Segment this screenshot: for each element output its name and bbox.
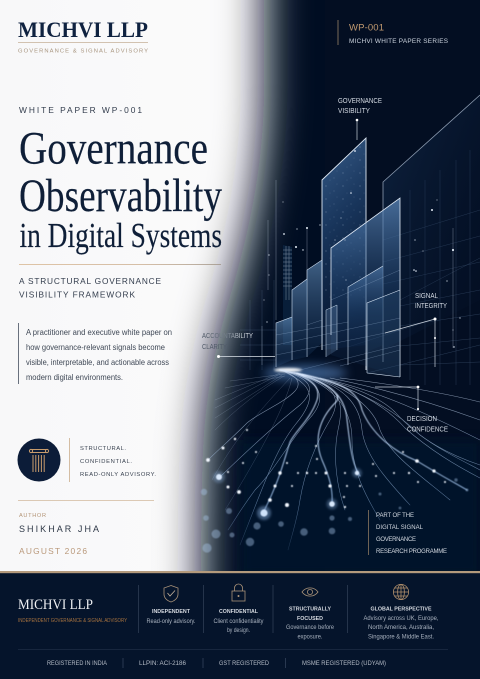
callout: governance visibility: VISIBILITY [338,106,370,115]
panel D [348,266,383,360]
feature: structurally focused: FOCUSED [297,616,323,622]
title: Governance [19,122,208,174]
eyebrow: WHITE PAPER WP-001 [19,105,142,115]
feature: confidential [214,584,264,634]
motto: STRUCTURAL. [80,446,126,452]
registration row: REGISTERED IN INDIA [47,661,107,667]
feature: global perspective: North America, Australia, [368,625,434,631]
background grid lines [240,150,480,385]
registration row: GST REGISTERED [219,661,270,667]
callout: signal integrity: INTEGRITY [415,301,447,310]
callout: decision confidence [375,386,448,434]
panel I [326,305,337,357]
callout: signal integrity: SIGNAL [415,291,438,300]
feature: global perspective: Advisory across UK, Europe, [364,616,439,622]
footer band [0,571,480,679]
subtitle: VISIBILITY FRAMEWORK [19,290,135,300]
author [19,513,99,556]
feature: independent [146,586,196,625]
abstract: how governance-relevant signals become [26,342,165,352]
feature: global perspective: GLOBAL PERSPECTIVE [370,606,432,612]
subtitle [19,276,161,300]
callout: governance visibility [338,96,382,140]
feature: structurally focused: exposure. [298,634,323,640]
feature: structurally focused: STRUCTURALLY [289,606,331,612]
research programme note: PART OF THE [376,513,414,519]
panel B outline [383,95,480,350]
vanishing point glow [263,365,347,381]
series tag: MICHVI WHITE PAPER SERIES [349,38,448,45]
subtitle: A STRUCTURAL GOVERNANCE [19,276,161,286]
author: SHIKHAR JHA [19,524,99,534]
panel G [292,279,307,360]
panel A [322,138,366,350]
abstract: visible, interpretable, and actionable across [26,357,170,367]
series tag: WP-001 [349,22,384,34]
research programme note: RESEARCH PROGRAMME [376,549,447,555]
feature: confidential: CONFIDENTIAL [219,609,258,615]
abstract: A practitioner and executive white paper on [26,327,172,337]
building: glass panels [276,95,480,377]
brand logo: GOVERNANCE & SIGNAL ADVISORY [18,48,148,54]
title [19,122,222,255]
feature: independent: Read-only advisory. [146,619,196,625]
abstract: modern digital environments. [26,372,123,382]
feature: independent: INDEPENDENT [152,609,190,615]
panel F [307,260,322,357]
motto: READ-ONLY ADVISORY. [80,472,156,478]
signal streams [208,370,480,550]
registration row [47,658,386,668]
callout: decision confidence: DECISION [407,414,437,423]
callout: signal integrity [385,291,447,367]
title: in Digital Systems [20,216,222,255]
callout: accountability clarity: CLARITY [202,342,227,351]
panel E [367,290,400,377]
scattered sparks [264,150,461,348]
footer separators [138,585,348,633]
feature: confidential: by design. [227,628,250,634]
brand logo [18,17,148,54]
title: Observability [19,170,222,222]
footer brand: MICHVI LLP [18,597,93,613]
feature: structurally focused: Governance before [286,625,335,631]
panel H [276,317,292,367]
icon: pillar [18,438,60,482]
series tag [338,20,448,45]
motto [80,446,156,478]
brand logo: MICHVI LLP [18,17,148,42]
research programme note [368,510,447,555]
research programme note: GOVERNANCE [376,537,416,543]
callout: accountability clarity: ACCOUNTABILITY [202,331,253,340]
feature: confidential: Client confidentiality [214,619,264,625]
stream data points [201,429,469,553]
feature: global perspective: Singapore & Middle East. [368,634,434,640]
callout: governance visibility: GOVERNANCE [338,96,382,105]
abstract [18,323,172,384]
research programme note: DIGITAL SIGNAL [376,525,424,531]
grid tower [283,245,292,345]
panel cross lines [276,270,400,372]
feature: global perspective [364,584,439,640]
author: AUTHOR [19,513,46,519]
footer brand [18,597,128,624]
motto: CONFIDENTIAL. [80,459,132,465]
feature: structurally focused [286,588,335,640]
author: AUGUST 2026 [19,546,87,556]
registration row: LLPIN: ACI-2186 [139,661,187,667]
dark technology panel [201,0,480,640]
callout: decision confidence: CONFIDENCE [407,424,448,434]
panel C [331,198,400,377]
footer brand: INDEPENDENT GOVERNANCE & SIGNAL ADVISORY [18,618,128,624]
callout: accountability clarity [202,331,275,358]
registration row: MSME REGISTERED (UDYAM) [302,661,386,667]
